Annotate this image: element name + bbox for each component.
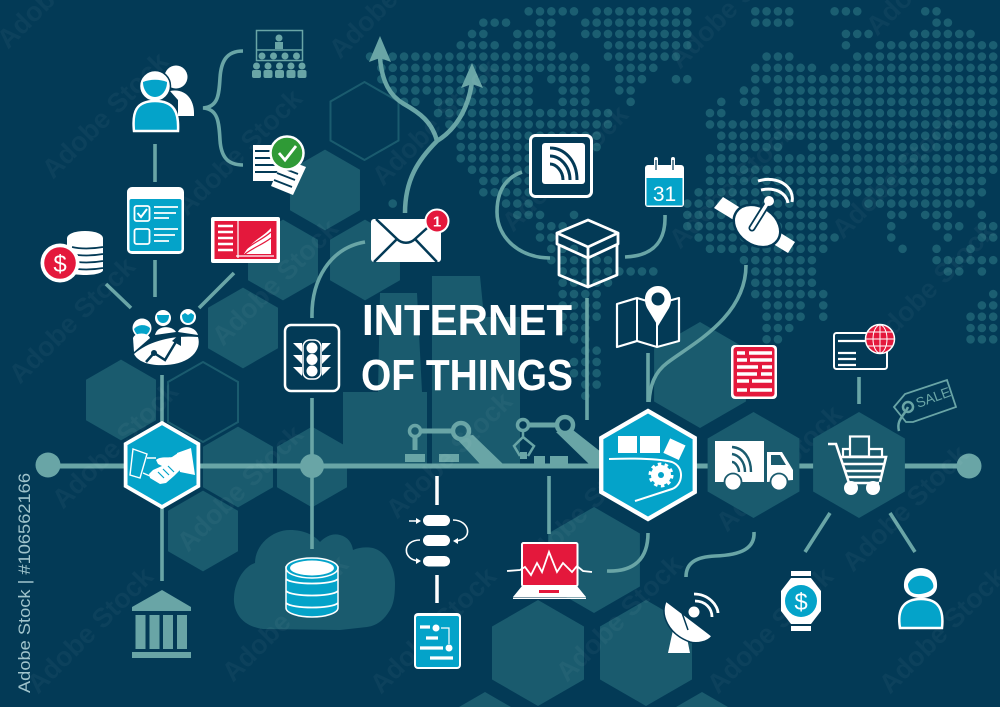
icon: web page with globe <box>834 324 894 369</box>
watermarks: Adobe Stock <box>710 399 849 537</box>
icon: coins <box>40 231 103 282</box>
dotted world map <box>370 11 994 396</box>
watermarks: Adobe Stock <box>513 441 652 579</box>
watermarks: Adobe Stock <box>550 549 689 687</box>
stock id label: Adobe Stock | #106562166 <box>16 473 34 693</box>
line end nodes <box>36 452 982 478</box>
node: delivery truck hexagon <box>708 412 799 518</box>
icon: checklist document <box>127 187 184 254</box>
node: shopping cart hexagon <box>813 412 905 518</box>
watermarks: Adobe Stock <box>366 53 505 191</box>
watermarks: Adobe Stock <box>171 419 310 557</box>
icon: calendar <box>645 159 684 207</box>
icon: smart watch <box>781 571 821 631</box>
factory silhouette <box>343 276 520 466</box>
icon: sale tag: SALE <box>914 384 953 411</box>
icon: laptop monitor <box>507 543 592 599</box>
icon: coins: $ <box>53 251 67 278</box>
watermarks: Adobe Stock <box>663 116 802 254</box>
watermarks: Adobe Stock <box>826 106 965 244</box>
icon: satellite <box>714 179 795 256</box>
icon: box <box>557 220 618 287</box>
background hexagons <box>86 150 746 707</box>
icon: satellite dish <box>664 594 718 653</box>
title: OF THINGS <box>361 351 573 400</box>
icon: team performance dial <box>132 309 199 365</box>
icon: red news document <box>731 345 777 399</box>
icon: map pin <box>617 286 679 347</box>
watermarks: Adobe Stock <box>46 376 185 514</box>
title: INTERNET <box>362 296 572 345</box>
icon: sale tag <box>894 380 956 431</box>
connector lines <box>48 51 970 581</box>
icon: red chart panel <box>211 217 280 263</box>
icon: database <box>286 558 338 617</box>
icon: traffic light <box>285 325 339 391</box>
robot arm two <box>514 417 601 465</box>
cloud <box>234 530 395 630</box>
watermarks: Adobe Stock <box>380 386 519 524</box>
robot arm one <box>405 423 503 464</box>
icon: customer person <box>899 568 942 628</box>
watermarks: Adobe Stock <box>701 561 840 699</box>
icon: envelope notification: 1 <box>433 214 441 230</box>
watermarks: Adobe Stock <box>170 83 309 221</box>
watermarks: Adobe Stock <box>836 439 975 577</box>
node: conveyor hexagon <box>601 411 695 519</box>
icon: process flow <box>406 476 468 603</box>
icon: conference audience <box>252 30 306 78</box>
icon: wireless signal square <box>530 136 592 196</box>
icon: people group <box>134 66 194 131</box>
icon: approved documents <box>253 136 306 195</box>
node: handshake hexagon <box>126 423 198 507</box>
outlined hexagons <box>168 82 398 442</box>
title <box>361 296 573 400</box>
watermarks: Adobe Stock <box>36 46 175 184</box>
watermarks: Adobe Stock <box>216 549 355 687</box>
icon: smart watch: $ <box>794 589 808 616</box>
icon: bank <box>132 590 191 658</box>
watermarks: Adobe Stock <box>3 251 142 389</box>
arrow heads <box>369 36 483 88</box>
icon: gantt document <box>414 613 461 669</box>
watermarks: Adobe Stock <box>21 561 160 699</box>
watermarks: Adobe Stock <box>863 216 1000 354</box>
icon: envelope notification <box>371 210 448 262</box>
watermarks: Adobe Stock <box>496 99 635 237</box>
watermarks: Adobe Stock <box>364 561 503 699</box>
watermarks: Adobe Stock <box>206 213 345 351</box>
icon: calendar: 31 <box>653 183 676 206</box>
